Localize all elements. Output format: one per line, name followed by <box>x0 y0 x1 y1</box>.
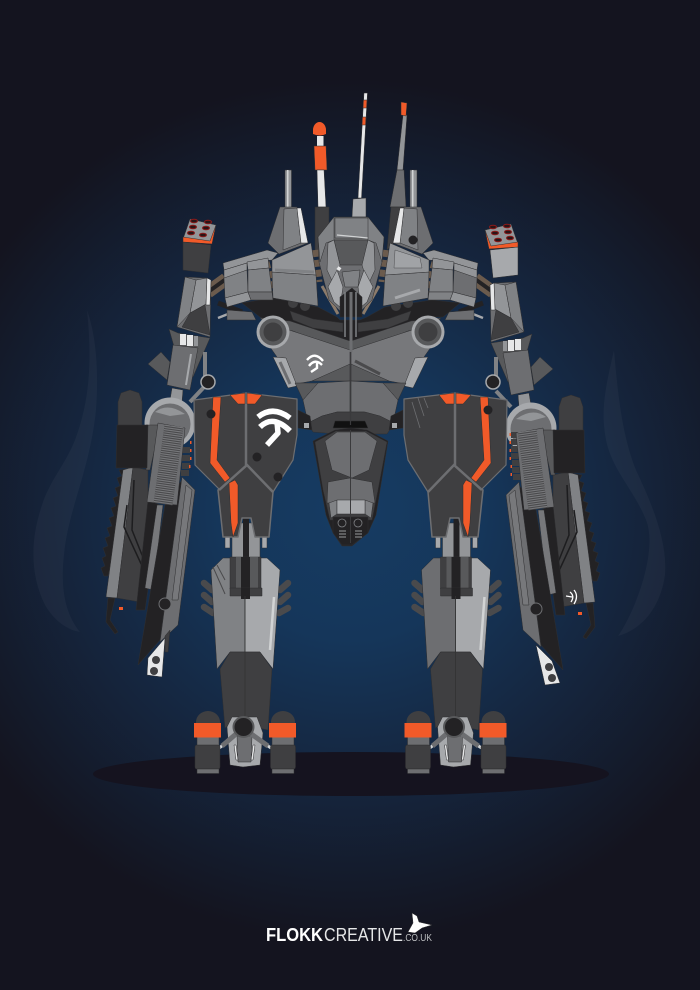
left gun teeth <box>101 468 134 576</box>
cables to arms <box>208 250 493 318</box>
right pistons <box>510 432 522 480</box>
right fins <box>414 583 498 613</box>
right elbow link <box>486 357 511 407</box>
right shoulder pad <box>383 207 478 307</box>
right gun body <box>506 472 595 670</box>
antenna: orange ball <box>313 122 329 252</box>
ground shadow <box>93 752 609 796</box>
left upper arm <box>177 277 211 337</box>
right gun teeth <box>567 473 600 581</box>
left gun pack <box>116 390 160 470</box>
left shoulder pad <box>223 207 318 307</box>
right inner piston <box>440 557 472 652</box>
gun barrels on shoulders <box>285 170 417 208</box>
antenna: centre striped <box>352 93 368 217</box>
right thigh shield <box>404 393 507 537</box>
antenna: right gray cannon <box>387 102 407 250</box>
torso <box>270 326 431 434</box>
right leg <box>404 518 506 774</box>
logo: Flokk Creative <box>266 913 432 945</box>
smoke wisp right <box>604 350 665 636</box>
left gun claw <box>106 598 123 634</box>
left ankle <box>220 652 272 730</box>
left fins <box>204 583 288 613</box>
right foot centre <box>430 717 482 767</box>
left arm <box>101 219 216 677</box>
logo bird <box>408 913 432 933</box>
right ankle <box>430 652 482 730</box>
smoke wisp left <box>33 310 97 632</box>
chest logo <box>307 356 323 372</box>
left outer toes <box>194 711 296 774</box>
right gun small logo <box>566 590 576 604</box>
right shin <box>422 558 490 669</box>
logo wordmark CREATIVE: CREATIVE <box>324 925 403 945</box>
left pistons <box>181 441 192 476</box>
struts under shoulders <box>227 310 474 320</box>
right gun white tip <box>536 645 560 685</box>
left gun white tip <box>147 638 165 677</box>
left foot centre <box>219 717 271 767</box>
right missile pod <box>485 224 518 278</box>
left knee piston <box>225 518 267 560</box>
shoulder joint rings <box>256 316 444 348</box>
right outer toes <box>404 711 506 774</box>
right knee piston <box>436 518 478 560</box>
left leg <box>194 518 296 774</box>
head <box>318 217 384 352</box>
pelvis snout <box>313 428 388 546</box>
hip struts <box>298 410 403 430</box>
left thigh logo <box>258 411 290 445</box>
right upper arm <box>490 282 524 342</box>
right shoulder ball <box>506 393 556 454</box>
right gun pack <box>541 395 585 475</box>
collar <box>242 286 460 352</box>
logo domain: .CO.UK <box>403 933 432 944</box>
left elbow <box>148 329 210 390</box>
right elbow <box>491 334 553 395</box>
left elbow link <box>190 352 215 402</box>
right ribbed magazine <box>516 428 554 510</box>
left inner piston <box>230 557 262 652</box>
right arm <box>485 224 600 685</box>
left missile pod <box>183 219 216 273</box>
left ribbed magazine <box>147 423 185 505</box>
left shoulder ball <box>144 388 196 448</box>
left thigh shield <box>194 393 297 537</box>
logo wordmark FLOKK: FLOKK <box>266 925 323 945</box>
left shin <box>211 558 280 669</box>
right gun claw <box>578 603 595 639</box>
left gun body <box>106 467 195 665</box>
